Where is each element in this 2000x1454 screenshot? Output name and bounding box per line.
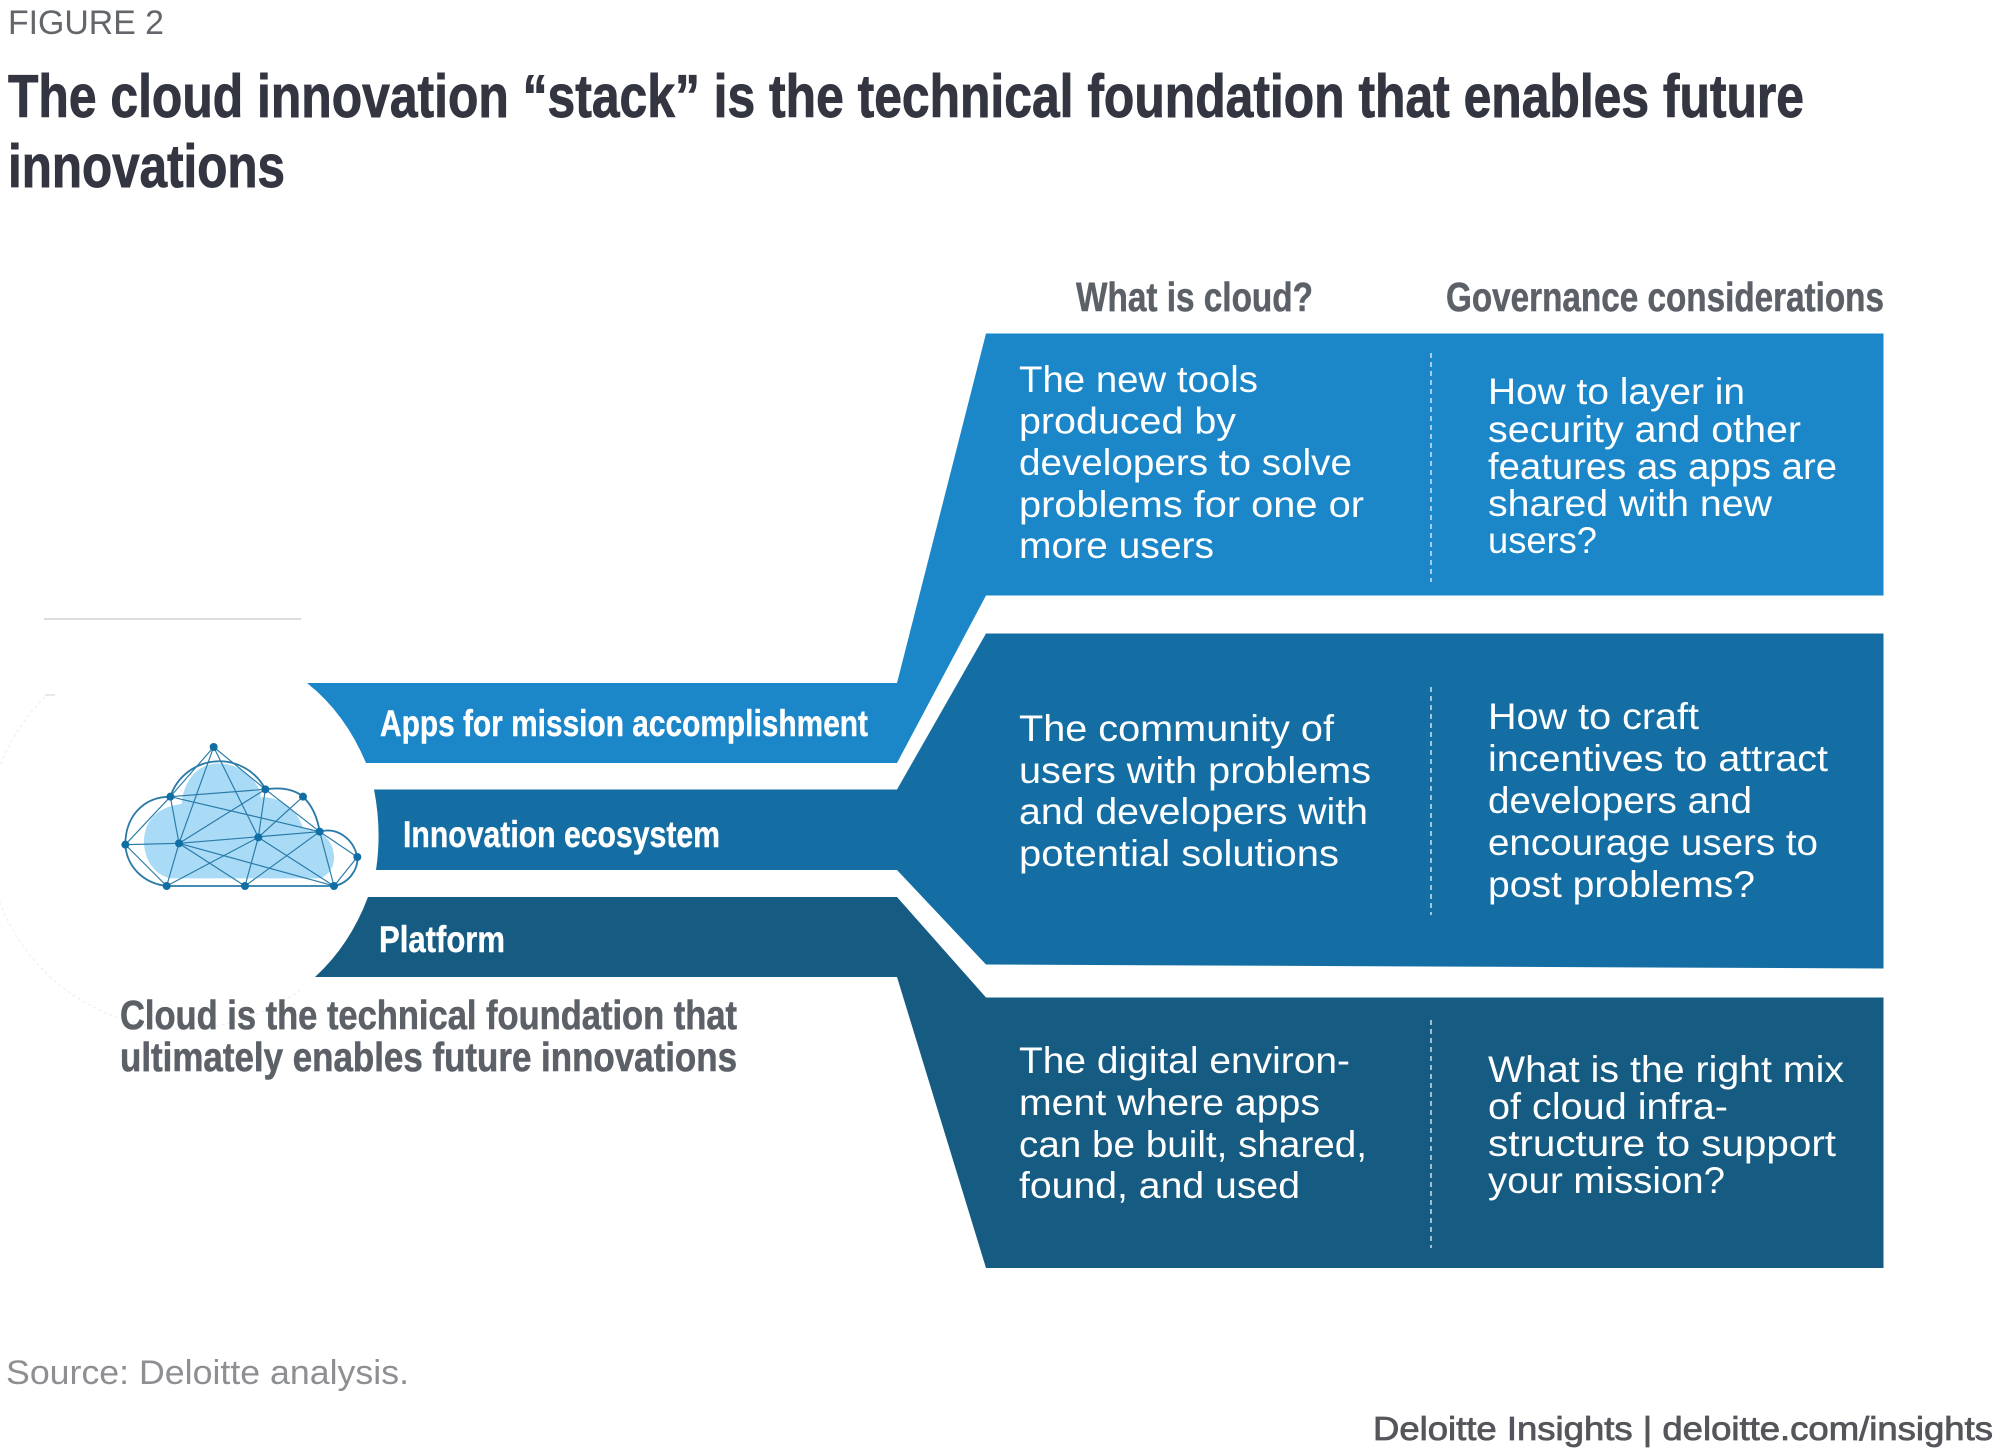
text: row 1 governance: shared with new xyxy=(1488,483,1772,524)
cloud caption: Cloud is the technical foundation that xyxy=(120,992,737,1038)
text: row 2 what is cloud: The community of xyxy=(1019,708,1335,749)
text: row 2 what is cloud: and developers with xyxy=(1019,791,1368,832)
text: row 1 governance: security and other xyxy=(1488,409,1801,450)
text: row 1 what is cloud xyxy=(1019,359,1364,566)
text: row 2 governance: post problems? xyxy=(1488,864,1755,905)
column heading: governance considerations: Governance considerations xyxy=(1446,274,1884,320)
text: row 3 governance: your mission? xyxy=(1488,1160,1725,1201)
text: row 3 governance: What is the right mix xyxy=(1488,1049,1845,1090)
text: row 2 governance: incentives to attract xyxy=(1488,738,1829,779)
cloud caption: ultimately enables future innovations xyxy=(120,1034,737,1080)
text: row 2 governance: developers and xyxy=(1488,780,1752,821)
dashed divider row 1 xyxy=(1430,353,1432,582)
source note: Source: Deloitte analysis. xyxy=(6,1354,409,1392)
text: row 3 governance: of cloud infra- xyxy=(1488,1086,1728,1127)
text: row 1 what is cloud: developers to solve xyxy=(1019,442,1352,483)
text: row 3 governance xyxy=(1488,1049,1845,1201)
text: row 2 governance: encourage users to xyxy=(1488,822,1818,863)
band label: innovation ecosystem: Innovation ecosystem xyxy=(403,814,720,855)
faint circle around cloud xyxy=(0,619,301,1029)
dashed divider row 2 xyxy=(1430,687,1432,915)
column heading: what is cloud: What is cloud? xyxy=(1076,274,1313,320)
dashed divider row 3 xyxy=(1430,1020,1432,1248)
icon: network cloud xyxy=(121,743,361,890)
text: row 2 what is cloud xyxy=(1019,708,1371,874)
band label: platform: Platform xyxy=(379,919,505,960)
text: row 1 governance xyxy=(1488,371,1837,561)
text: row 3 what is cloud: The digital environ- xyxy=(1019,1040,1350,1081)
text: row 1 governance: users? xyxy=(1488,520,1597,561)
text: row 2 what is cloud: potential solutions xyxy=(1019,833,1339,874)
text: row 3 what is cloud: found, and used xyxy=(1019,1165,1300,1206)
text: row 1 what is cloud: problems for one or xyxy=(1019,484,1364,525)
cloud caption xyxy=(120,992,737,1080)
text: row 3 what is cloud: ment where apps xyxy=(1019,1082,1320,1123)
figure label: FIGURE 2 xyxy=(8,4,164,42)
text: row 2 governance xyxy=(1488,696,1829,905)
text: row 3 what is cloud: can be built, shared, xyxy=(1019,1124,1367,1165)
text: row 1 what is cloud: produced by xyxy=(1019,400,1237,442)
title: innovations xyxy=(8,133,285,200)
text: row 3 what is cloud xyxy=(1019,1040,1367,1206)
panel: innovation ecosystem band xyxy=(374,634,1884,968)
panel: platform band xyxy=(315,897,1884,1268)
text: row 1 what is cloud: The new tools xyxy=(1019,359,1258,400)
text: row 1 governance: features as apps are xyxy=(1488,446,1837,487)
text: row 3 governance: structure to support xyxy=(1488,1123,1837,1164)
credit line: Deloitte Insights | deloitte.com/insights xyxy=(1373,1410,1993,1447)
title xyxy=(8,63,1804,200)
text: row 1 governance: How to layer in xyxy=(1488,371,1745,412)
band label: apps: Apps for mission accomplishment xyxy=(380,703,868,744)
text: row 2 what is cloud: users with problems xyxy=(1019,750,1371,791)
text: row 2 governance: How to craft xyxy=(1488,696,1700,737)
text: row 1 what is cloud: more users xyxy=(1019,525,1214,566)
panel: apps band xyxy=(307,334,1884,763)
